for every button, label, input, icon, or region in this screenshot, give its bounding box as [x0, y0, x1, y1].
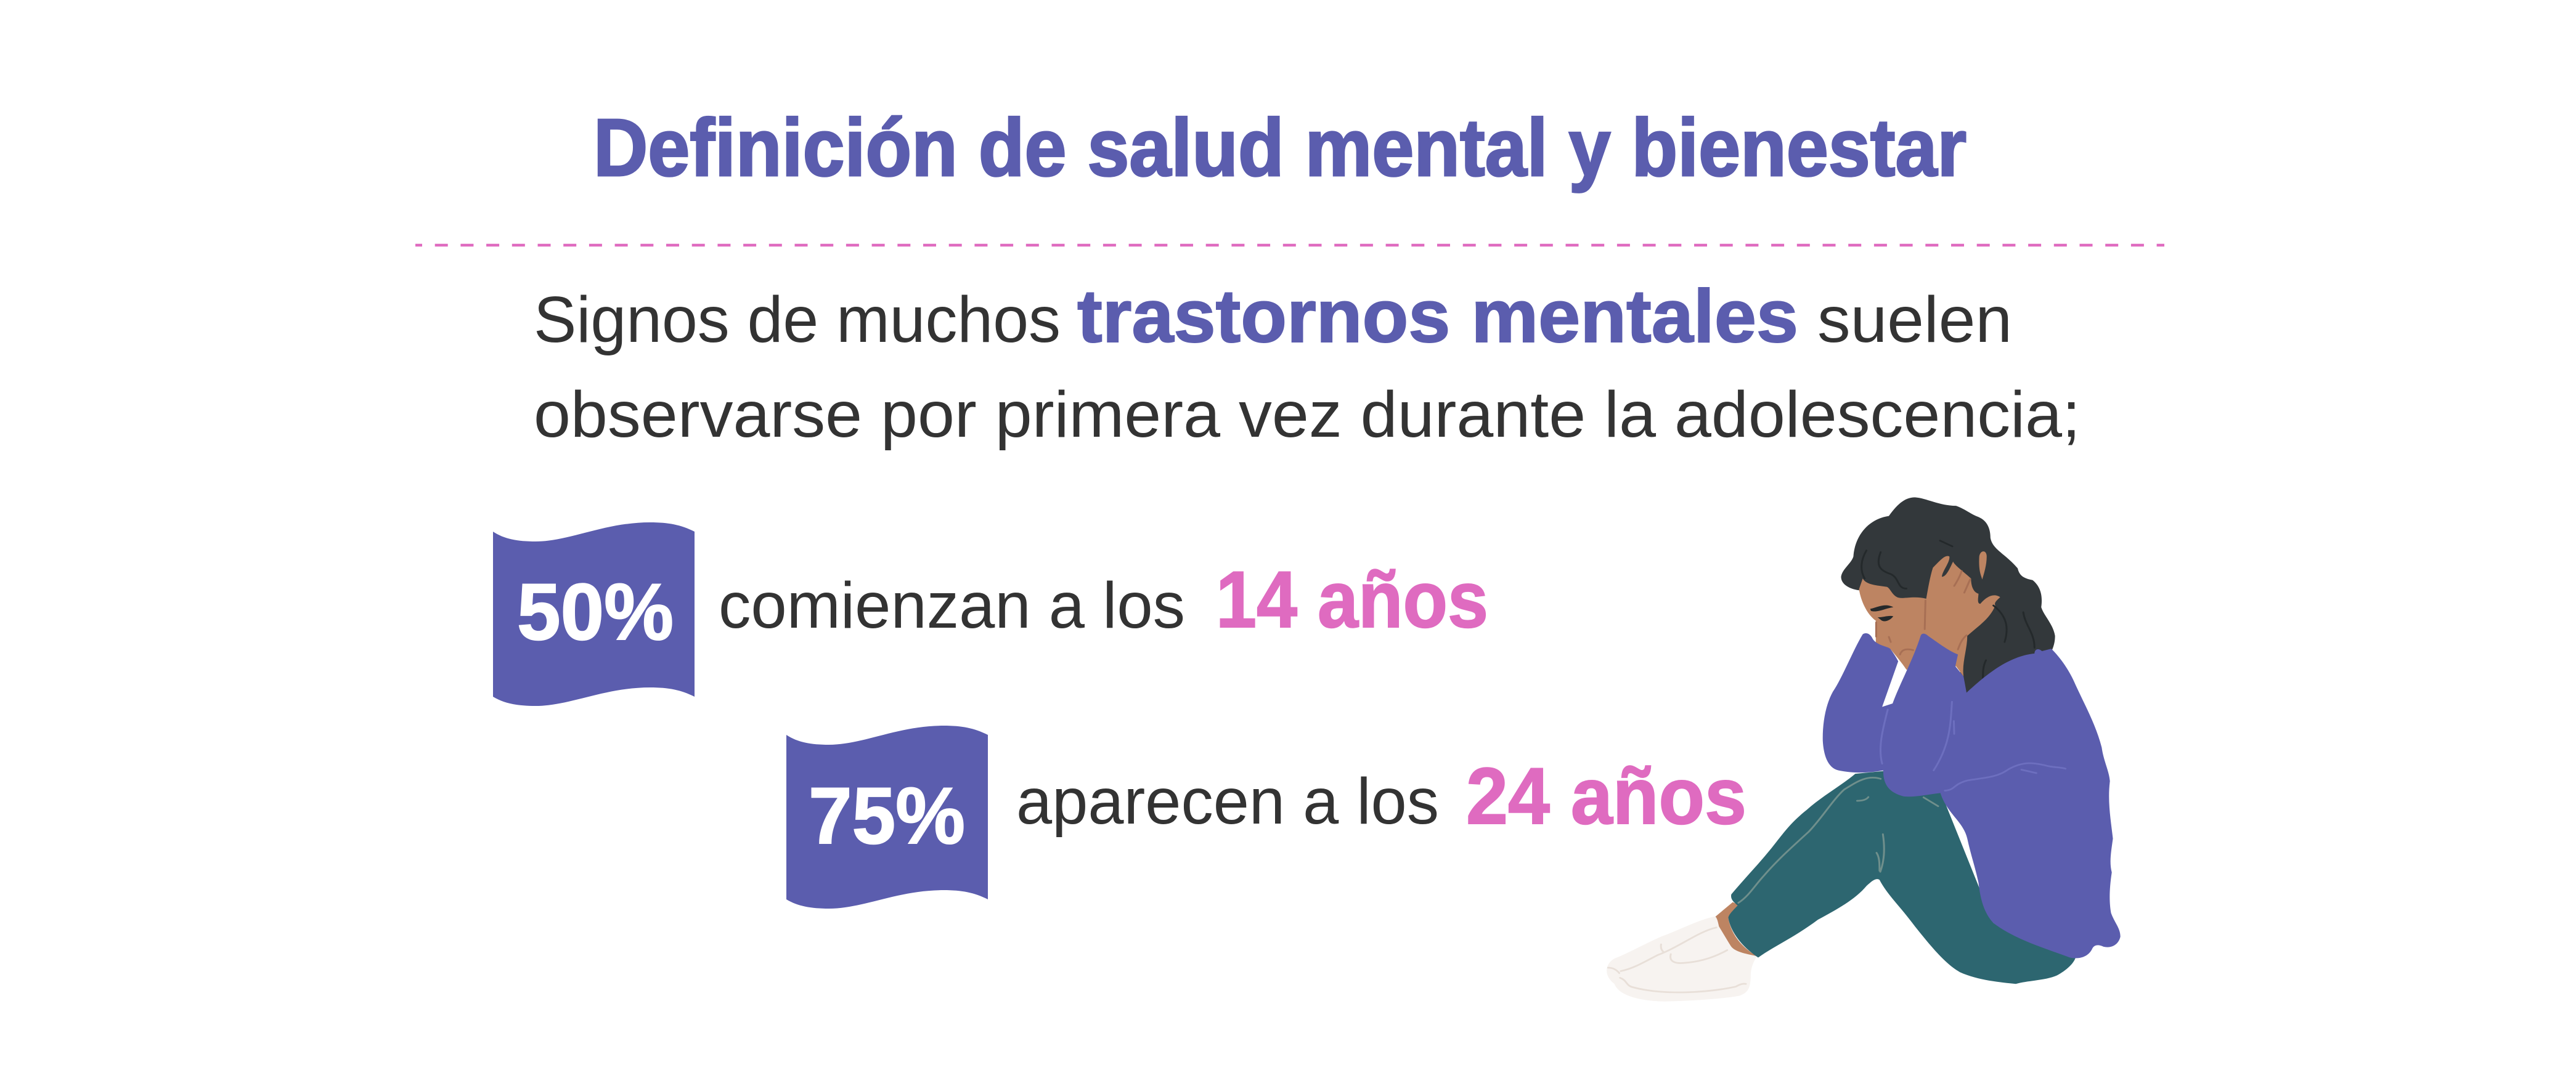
sneaker seams	[1608, 928, 1746, 992]
label: aparecen a los: aparecen a los	[1016, 765, 1439, 838]
statistic row: 75% at 24 years	[786, 726, 1747, 909]
label: comienzan a los: comienzan a los	[719, 569, 1185, 642]
title: Definición de salud mental y bienestar	[593, 102, 1967, 193]
trousers	[1728, 771, 2076, 984]
flag badge 50%	[493, 522, 695, 706]
ear	[1979, 551, 1987, 580]
intro text block: suelen	[1817, 283, 2012, 356]
intro text block: Signos de muchos	[534, 283, 1061, 356]
ankle	[1714, 902, 1757, 956]
value: 14 años: 14 años	[1216, 554, 1488, 644]
hair	[1841, 497, 2055, 697]
value: 24 años: 24 años	[1466, 751, 1747, 841]
75% value: 75%	[809, 771, 965, 861]
sleeve: far arm	[1823, 633, 1898, 772]
illustration: seated distressed woman holding her head	[1607, 497, 2121, 1002]
facial features and hair strands	[1862, 541, 2034, 678]
face, neck and hand	[1859, 556, 2000, 676]
intro text block: observarse por primera vez durante la adolescencia;	[534, 378, 2081, 451]
sweater fold lines	[1880, 702, 2066, 791]
50% value: 50%	[517, 567, 674, 657]
sneaker	[1607, 917, 1757, 1002]
statistic row: 50% at 14 years	[493, 522, 1488, 706]
flag badge 75%	[786, 726, 988, 909]
intro text block	[534, 274, 2081, 451]
intro text block: trastornos mentales	[1077, 274, 1798, 358]
sweater body and near arm	[1881, 634, 2121, 958]
trouser creases	[1738, 777, 1938, 903]
